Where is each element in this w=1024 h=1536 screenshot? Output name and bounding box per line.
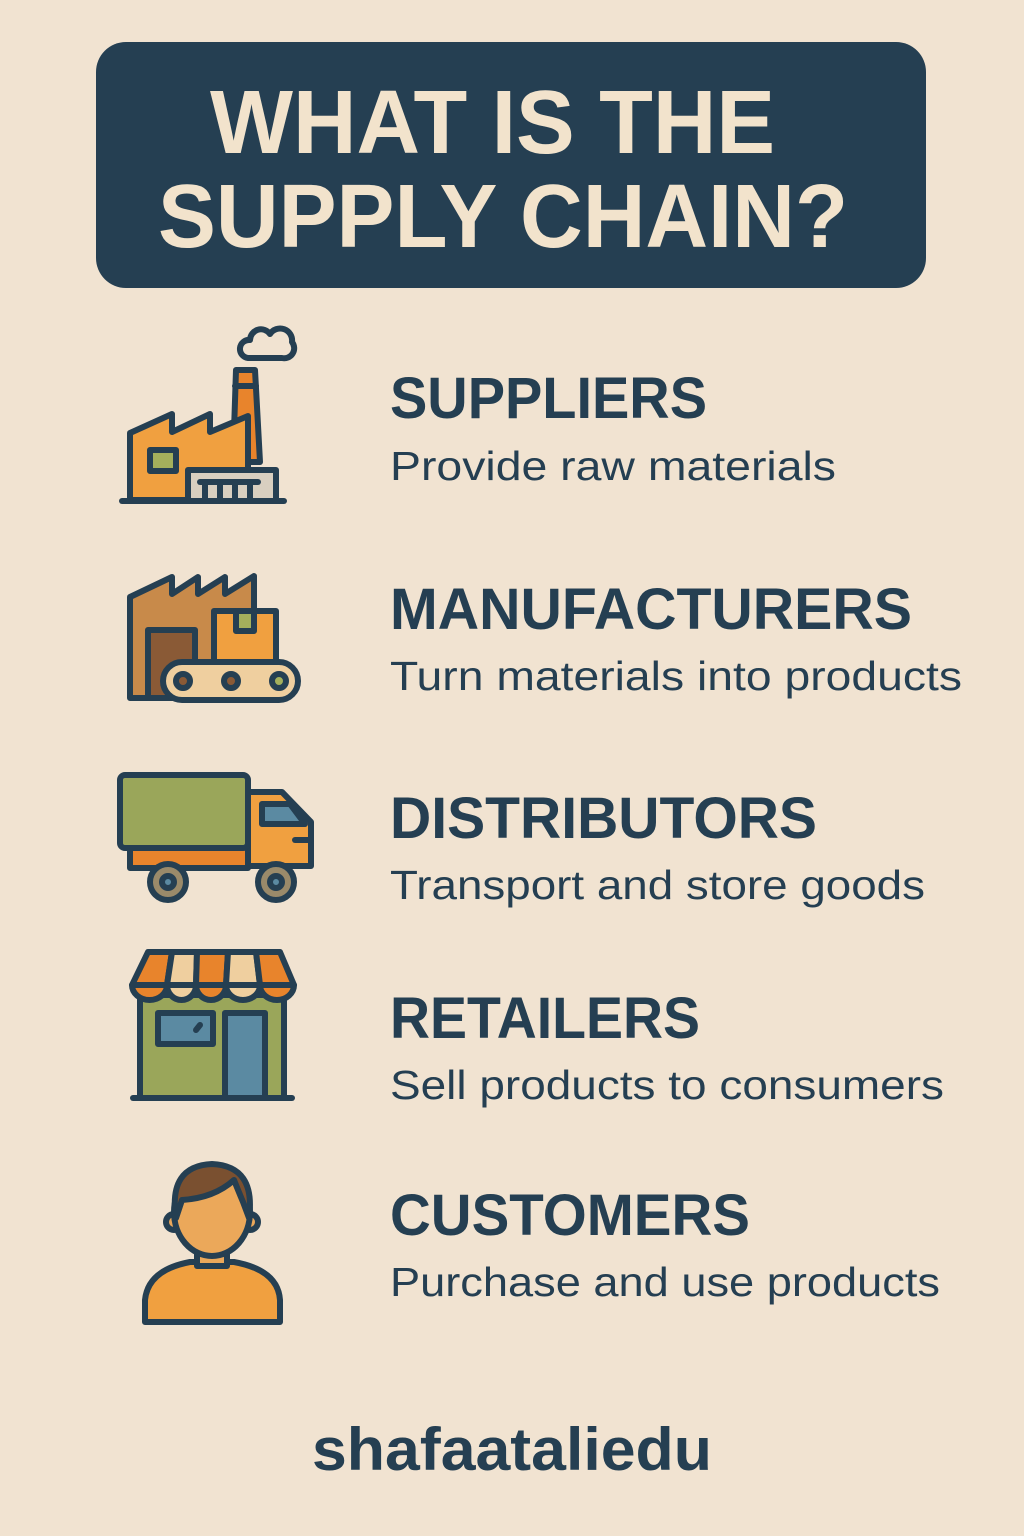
icon: truck	[120, 775, 311, 900]
step 1 text: Provide raw materials	[390, 443, 836, 489]
step 5 text: Purchase and use products	[390, 1259, 940, 1305]
step 5 text: CUSTOMERS	[390, 1183, 750, 1248]
step 3 text: Transport and store goods	[390, 862, 925, 908]
step 5 text	[390, 1183, 940, 1305]
step 3 text	[390, 786, 925, 908]
title banner: SUPPLY CHAIN?	[158, 167, 848, 267]
icon: supplier factory	[122, 328, 294, 501]
step 4 text	[390, 986, 944, 1108]
icon: customer	[145, 1164, 280, 1322]
icon: store	[132, 952, 294, 1098]
step 2 text: Turn materials into products	[390, 653, 962, 699]
icon: manufacturer factory	[130, 576, 298, 700]
footer brand: shafaataliedu	[312, 1416, 712, 1483]
step 1 text: SUPPLIERS	[390, 366, 707, 431]
step 1 text	[390, 366, 836, 489]
step 2 text	[390, 577, 962, 699]
step 4 text: Sell products to consumers	[390, 1062, 944, 1108]
step 2 text: MANUFACTURERS	[390, 577, 912, 642]
title banner	[96, 42, 926, 288]
step 4 text: RETAILERS	[390, 986, 700, 1051]
title banner: WHAT IS THE	[210, 73, 775, 173]
step 3 text: DISTRIBUTORS	[390, 786, 817, 851]
